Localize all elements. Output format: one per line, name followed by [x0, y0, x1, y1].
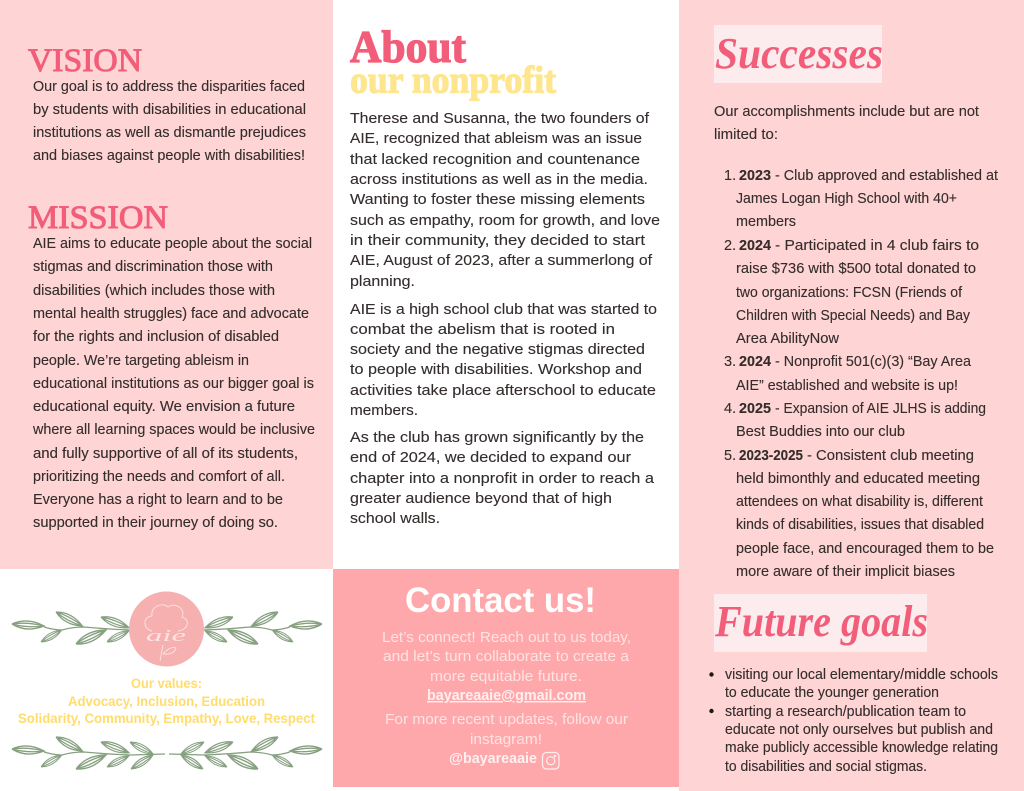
- text block: contact message: and let’s turn collaborate to create a: [383, 649, 630, 665]
- text block: club paragraph: combat the abelism that is rooted in: [350, 321, 615, 338]
- list: successes timeline: members: [736, 214, 796, 230]
- text block: founders paragraph: AIE, recognized that ableism was an issue: [350, 130, 642, 147]
- text block: successes intro: limited to:: [714, 127, 778, 143]
- text block: mission body: [32, 236, 315, 531]
- text block: vision body: institutions as well as dismantle prejudices: [33, 125, 306, 141]
- text block: contact message: [382, 630, 631, 685]
- list: successes timeline: Area AbilityNow: [736, 331, 840, 347]
- heading: mission: MISSION: [28, 200, 168, 236]
- list: future goals: [709, 667, 998, 775]
- text block: founders paragraph: such as empathy, room for growth, and love: [350, 212, 660, 229]
- text block: mission body: people. We’re targeting ableism in: [33, 353, 249, 369]
- text block: nonprofit paragraph: [350, 429, 655, 527]
- list: successes timeline: - Expansion of AIE JLHS is adding: [775, 401, 986, 417]
- text block: successes intro: Our accomplishments include but are not: [714, 104, 979, 120]
- list: successes timeline: 2023-2025: [739, 448, 803, 464]
- text block: mission body: disabilities (which includes those with: [33, 283, 275, 299]
- list: successes timeline: kinds of disabilities, issues that disabled: [736, 517, 984, 533]
- panel: successes and future goals background: [679, 0, 1024, 791]
- text block: nonprofit paragraph: As the club has grown significantly by the: [350, 429, 644, 446]
- text block: founders paragraph: Wanting to foster these missing elements: [350, 191, 645, 208]
- decoration: top left branch: [12, 609, 130, 648]
- text block: mission body: for the rights and inclusion of disabled: [33, 329, 279, 345]
- text block: club paragraph: members.: [350, 402, 418, 419]
- text block: vision body: [33, 79, 306, 164]
- text block: club paragraph: AIE is a high school club that was started to: [350, 301, 657, 318]
- decoration: bottom right branch: [169, 734, 322, 773]
- list: successes timeline: 2023: [739, 168, 771, 184]
- heading: contact us: Contact us!: [405, 581, 596, 620]
- list: successes timeline: more aware of their implicit biases: [736, 564, 955, 580]
- panel: vision: [28, 43, 306, 164]
- list: successes timeline: 5.: [724, 448, 736, 464]
- text block: mission body: educational equity. We envision a future: [33, 399, 295, 415]
- text block: our values: Solidarity, Community, Empathy, Love, Respect: [18, 710, 315, 726]
- list: successes timeline: - Consistent club meeting: [807, 448, 974, 464]
- text block: founders paragraph: across institutions as well as in the media.: [350, 171, 648, 188]
- list: successes timeline: people face, and encouraged them to be: [736, 541, 994, 557]
- list: future goals: to educate the younger generation: [725, 685, 939, 701]
- text block: instagram message: [385, 712, 628, 748]
- list: successes timeline: 3.: [724, 354, 736, 370]
- text block: club paragraph: activities take place afterschool to educate: [350, 382, 656, 399]
- text block: mission body: Everyone has a right to learn and to be: [33, 492, 283, 508]
- text block: our values: Our values:: [131, 675, 202, 691]
- panel: values: [12, 592, 322, 773]
- list: successes timeline: [724, 168, 998, 580]
- panel: mission: [28, 200, 315, 531]
- list: successes timeline: attendees on what disability is, different: [736, 494, 983, 510]
- text block: contact message: more equitable future.: [430, 669, 582, 685]
- text block: nonprofit paragraph: greater audience beyond that of high: [350, 490, 612, 507]
- panel: contact background: [333, 569, 679, 787]
- icon: instagram: [542, 752, 559, 769]
- text block: mission body: mental health struggles) face and advocate: [33, 306, 309, 322]
- list: successes timeline: held bimonthly and educated meeting: [736, 471, 980, 487]
- text: email: bayareaaie@gmail.com: [427, 688, 586, 704]
- list: successes timeline: James Logan High School with 40+: [736, 191, 957, 207]
- text block: founders paragraph: in their community, they decided to start: [350, 232, 646, 249]
- text block: contact message: Let’s connect! Reach out to us today,: [382, 630, 631, 646]
- heading: future goals: Future goals: [714, 597, 928, 646]
- list: successes timeline: two organizations: FCSN (Friends of: [736, 285, 963, 301]
- text block: our values: [18, 675, 315, 726]
- heading: about: About: [350, 22, 466, 72]
- list: successes timeline: 1.: [724, 168, 736, 184]
- list: successes timeline: AIE” established and website is up!: [736, 378, 958, 394]
- text block: founders paragraph: Therese and Susanna, the two founders of: [350, 110, 650, 127]
- text block: club paragraph: [350, 301, 657, 419]
- heading highlight: future goals: [714, 594, 927, 652]
- list: successes timeline: 2025: [739, 401, 771, 417]
- text block: founders paragraph: AIE, August of 2023, after a summerlong of: [350, 252, 653, 269]
- text block: club paragraph: society and the negative stigmas directed: [350, 341, 645, 358]
- text block: mission body: AIE aims to educate people about the social: [33, 236, 312, 252]
- text block: nonprofit paragraph: end of 2024, we decided to expand our: [350, 449, 631, 466]
- list: future goals: educate not only ourselves but publish and: [725, 722, 993, 738]
- list: successes timeline: Best Buddies into our club: [736, 424, 905, 440]
- text block: our values: Advocacy, Inclusion, Education: [68, 693, 265, 709]
- decoration: top right branch: [204, 609, 322, 648]
- list: successes timeline: raise $736 with $500 total donated to: [736, 261, 976, 277]
- list: successes timeline: - Nonprofit 501(c)(3) “Bay Area: [775, 354, 972, 370]
- list: successes timeline: - Club approved and established at: [775, 168, 998, 184]
- text block: mission body: educational institutions as our bigger goal is: [33, 376, 314, 392]
- text block: successes intro: [714, 104, 979, 143]
- logo: AIE flower badge: [129, 592, 204, 666]
- text: instagram handle: @bayareaaie: [449, 751, 537, 767]
- list: future goals: visiting our local elementary/middle schools: [725, 667, 998, 683]
- list: successes timeline: 2024: [739, 354, 771, 370]
- heading highlight: successes: [714, 25, 882, 83]
- text block: instagram message: instagram!: [470, 732, 542, 748]
- text block: vision body: and biases against people with disabilities!: [33, 148, 305, 164]
- list: successes timeline: 2.: [724, 238, 736, 254]
- text block: nonprofit paragraph: chapter into a nonprofit in order to reach a: [350, 470, 655, 487]
- panel: about background: [333, 0, 679, 569]
- decoration: bottom left branch: [12, 734, 165, 773]
- list: future goals: to disabilities and social stigmas.: [725, 759, 927, 775]
- text block: instagram message: For more recent updates, follow our: [385, 712, 628, 728]
- logo: AIE flower badge: aie: [146, 626, 187, 645]
- panel: future goals: [709, 594, 998, 775]
- text block: mission body: where all learning spaces would be inclusive: [32, 422, 315, 438]
- text block: founders paragraph: planning.: [350, 273, 415, 290]
- text block: vision body: by students with disabilities in educational: [33, 102, 306, 118]
- text block: mission body: supported in their journey of doing so.: [33, 515, 278, 531]
- list: future goals: starting a research/publication team to: [725, 704, 966, 720]
- text block: mission body: and fully supportive of all of its students,: [33, 446, 298, 462]
- heading: successes: Successes: [715, 29, 883, 78]
- heading: our nonprofit: our nonprofit: [350, 60, 556, 102]
- heading: vision: VISION: [28, 43, 142, 79]
- text block: club paragraph: to people with disabilities. Workshop and: [350, 361, 642, 378]
- list: future goals: make publicly accessible knowledge relating: [725, 740, 998, 756]
- panel: contact: [382, 581, 631, 769]
- list: successes timeline: Children with Special Needs) and Bay: [736, 308, 971, 324]
- text block: founders paragraph: that lacked recognition and countenance: [350, 151, 640, 168]
- panel: vision and mission background: [0, 0, 333, 569]
- text block: mission body: stigmas and discrimination those with: [33, 259, 273, 275]
- list: successes timeline: 4.: [724, 401, 736, 417]
- text block: nonprofit paragraph: school walls.: [350, 510, 440, 527]
- panel: successes: [714, 25, 998, 580]
- panel: about: [350, 22, 660, 527]
- list: successes timeline: - Participated in 4 club fairs to: [775, 238, 979, 254]
- text block: vision body: Our goal is to address the disparities faced: [33, 79, 305, 95]
- text block: mission body: prioritizing the needs and comfort of all.: [33, 469, 285, 485]
- text block: founders paragraph: [350, 110, 660, 290]
- list: successes timeline: 2024: [739, 238, 771, 254]
